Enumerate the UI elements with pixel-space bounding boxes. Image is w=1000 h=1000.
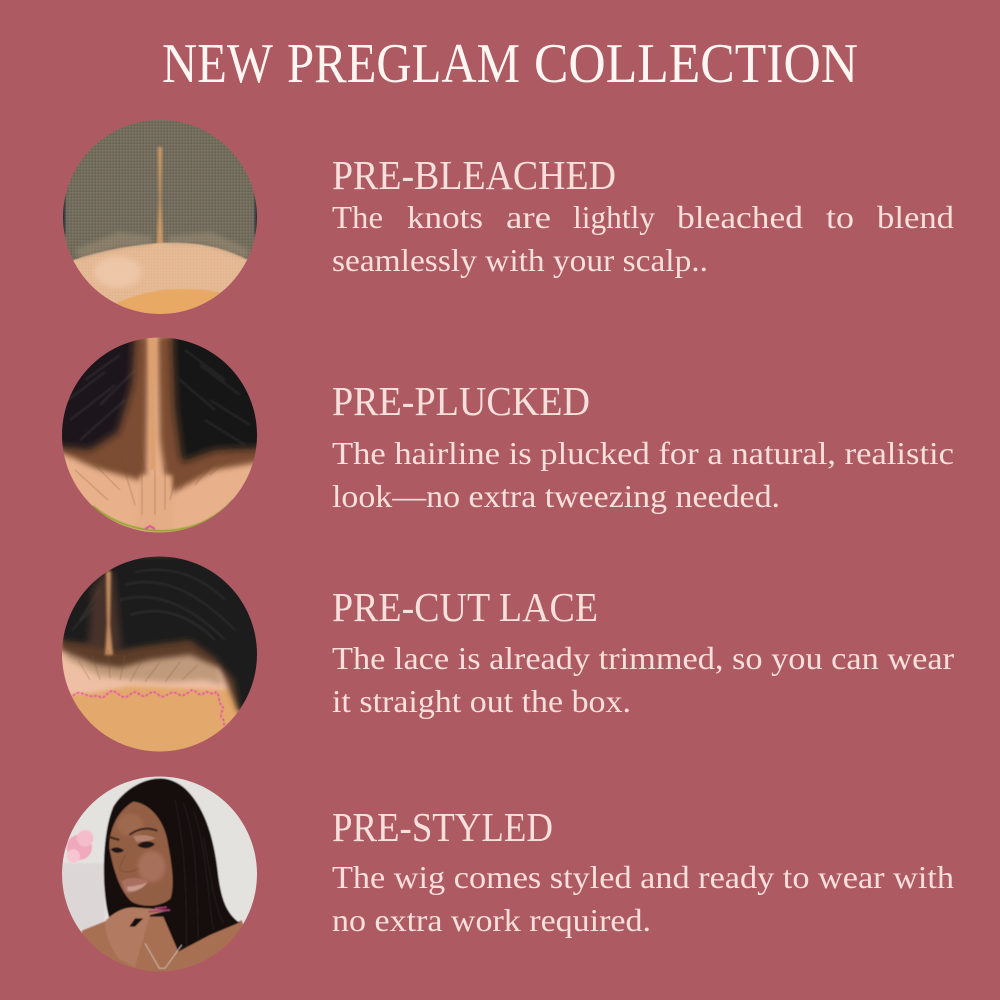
part	[105, 571, 113, 655]
description: pre-bleached: knots	[407, 199, 483, 235]
heading: pre-plucked: PRE-PLUCKED	[332, 378, 590, 424]
pre-styled text block	[332, 804, 954, 938]
lace below part	[137, 472, 176, 496]
pale highlight	[94, 256, 142, 288]
part	[148, 337, 157, 470]
centre part	[157, 147, 163, 244]
transition brown	[60, 336, 260, 495]
face	[109, 802, 173, 906]
photo: pre-cut lace closeup	[60, 555, 262, 755]
hair	[104, 778, 239, 952]
lips	[122, 878, 148, 893]
heading: pre-cut lace: PRE-CUT LACE	[332, 584, 598, 630]
description: pre-styled: The wig comes styled and ready to wear with	[332, 859, 954, 895]
necklace	[145, 943, 182, 968]
description: pre-plucked: look—no extra tweezing needed.	[332, 478, 780, 514]
pre-plucked text block	[332, 378, 954, 514]
shoulders and chest	[81, 916, 244, 972]
hand	[105, 907, 170, 967]
eyes	[111, 841, 155, 853]
nose	[120, 855, 138, 872]
right hair	[166, 338, 257, 466]
title: COLLECTION	[534, 33, 858, 95]
description: pre-bleached: lightly	[573, 199, 655, 235]
description: pre-styled: no extra work required.	[332, 902, 651, 938]
left dark edge	[63, 192, 66, 236]
description: pre-bleached: bleached	[677, 199, 803, 235]
photo: woman wearing straight bob wig	[62, 776, 257, 972]
description: pre-bleached: seamlessly with your scalp..	[332, 242, 708, 278]
lighter lace band	[60, 650, 232, 695]
title: NEW	[162, 33, 273, 95]
description: pre-bleached: The	[332, 199, 383, 235]
heading: pre-styled: PRE-STYLED	[332, 804, 553, 850]
pink dashed line	[73, 690, 224, 726]
hairline fade	[74, 232, 250, 258]
highlight	[138, 851, 166, 883]
photo: pre-plucked hairline closeup	[62, 338, 257, 532]
eye shadow	[133, 835, 155, 842]
description: pre-plucked: The hairline is plucked for a natural, realistic	[332, 435, 954, 471]
description: pre-bleached: to	[826, 199, 854, 235]
description: pre-bleached: are	[506, 199, 551, 235]
heading: pre-bleached: PRE-BLEACHED	[332, 152, 616, 198]
transition	[62, 556, 244, 713]
description: pre-bleached: blend	[877, 199, 954, 235]
lace band	[73, 242, 248, 304]
skin	[116, 288, 221, 314]
pink mark	[145, 526, 155, 529]
baby hairs	[74, 450, 224, 515]
photo: pre-bleached lace closeup	[60, 118, 262, 318]
description: pre-cut lace: The lace is already trimmed, so you can wear	[332, 640, 954, 676]
description: pre-cut lace: it straight out the box.	[332, 683, 631, 719]
pre-bleached text block	[332, 152, 954, 278]
flower	[67, 830, 93, 863]
brows	[108, 829, 157, 840]
brown near part	[88, 572, 122, 650]
wisps band	[65, 648, 222, 685]
green edge	[90, 500, 245, 535]
pre-cut lace text block	[332, 584, 954, 719]
wisps	[78, 650, 198, 682]
hair	[60, 555, 262, 722]
title: PREGLAM	[287, 33, 520, 95]
left hair	[62, 340, 140, 455]
